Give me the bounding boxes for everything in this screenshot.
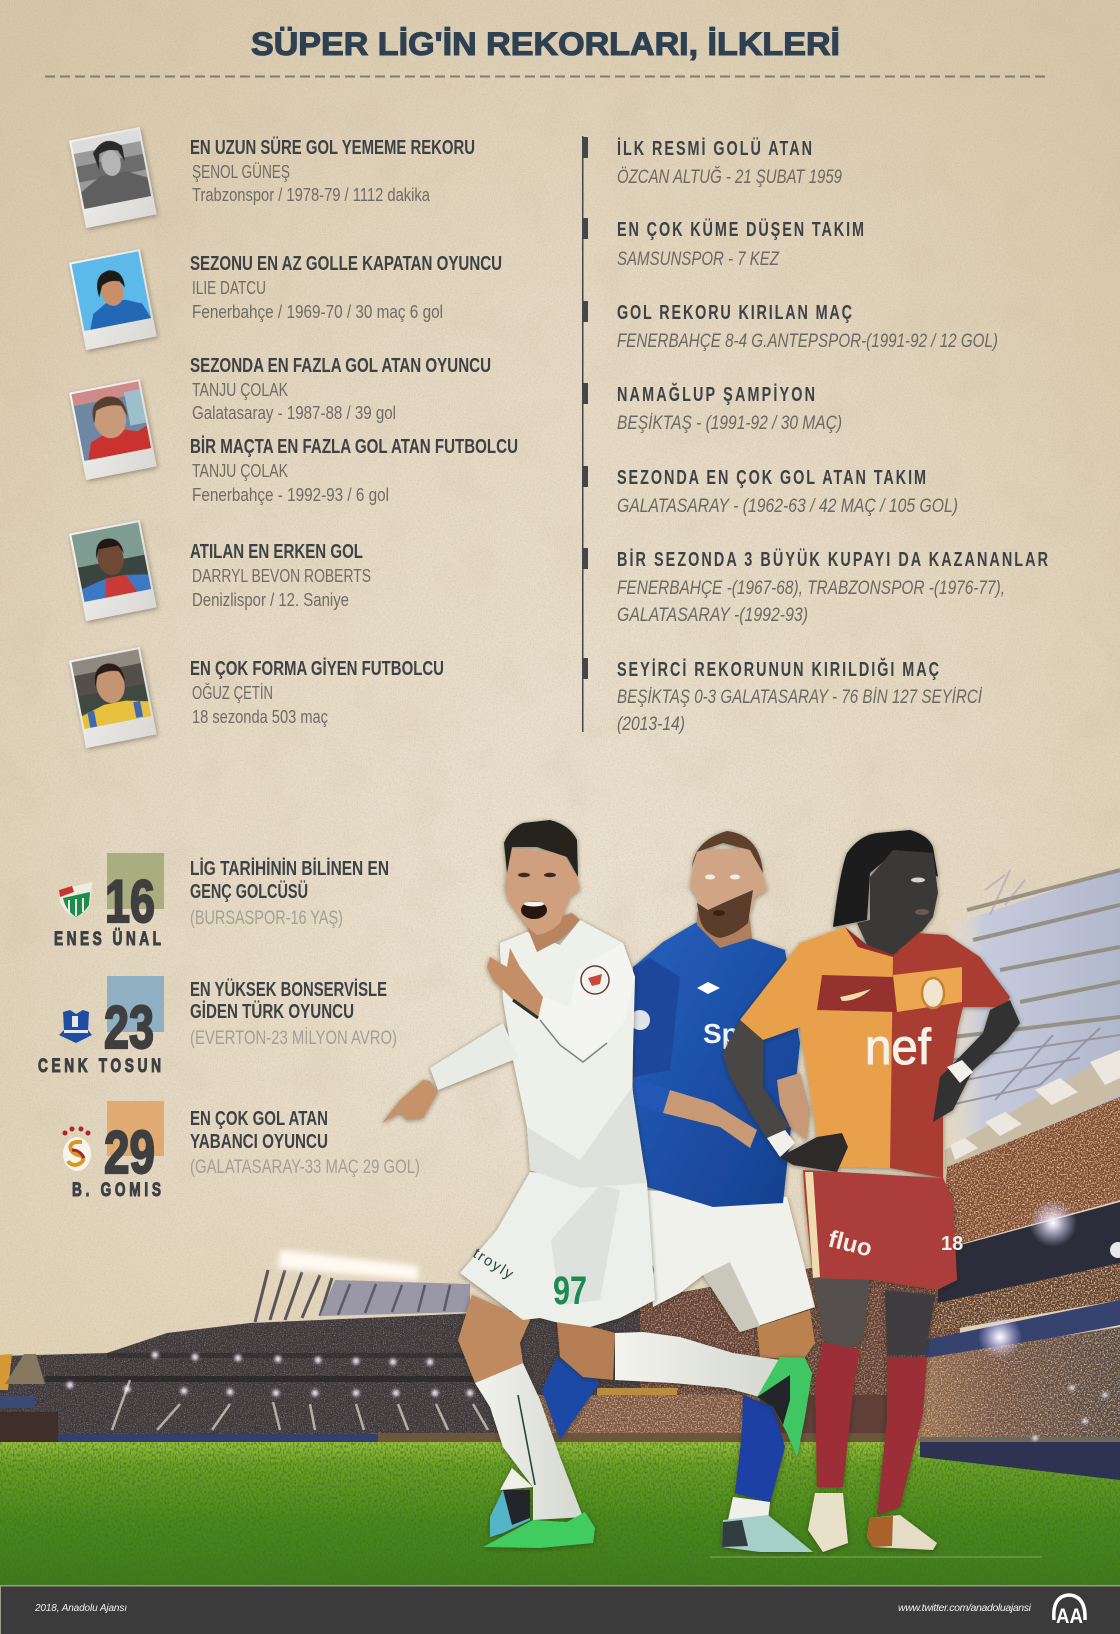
stat: Enes Ünal: 16 <box>105 868 155 935</box>
stat: B. Gomis: YABANCI OYUNCU <box>190 1131 328 1153</box>
footer: twitter link: www.twitter.com/anadoluajansi <box>898 1602 1032 1614</box>
player: Bafétimbi Gomis: nef <box>865 1019 931 1075</box>
player: Cenk Tosun: Sp <box>703 1018 739 1049</box>
record: most goals in a season: TANJU ÇOLAK <box>192 379 288 400</box>
record: goal record match: GOL REKORU KIRILAN MAÇ <box>617 301 852 324</box>
stadium roof right <box>945 868 1120 1172</box>
stat: B. Gomis: 29 <box>104 1119 155 1186</box>
polaroid: Şenol Güneş <box>69 127 157 228</box>
polaroid: Oğuz Çetin <box>69 647 157 748</box>
record: most goals in a season <box>190 355 491 423</box>
record: fewest goals conceded: ILIE DATCU <box>192 277 266 298</box>
stadium background <box>0 868 1120 1585</box>
record: three cups: FENERBAHÇE -(1967-68), TRABZONSPOR -(1976-77), <box>617 577 1005 599</box>
left stand details <box>0 1353 497 1444</box>
record: top scoring team: SEZONDA EN ÇOK GOL ATAN TAKIM <box>617 466 926 489</box>
stat: Cenk Tosun: EN YÜKSEK BONSERVİSLE <box>190 978 387 1001</box>
record: most relegations: EN ÇOK KÜME DÜŞEN TAKIM <box>617 218 864 241</box>
record: longest clean sheet: ŞENOL GÜNEŞ <box>192 161 290 182</box>
record: longest clean sheet: Trabzonspor / 1978-79 / 1112 dakika <box>192 184 431 205</box>
records: right column timeline <box>582 136 1048 735</box>
footer: copyright: 2018, Anadolu Ajansı <box>34 1603 127 1614</box>
record: most goals in a season: Galatasaray - 1987-88 / 39 gol <box>192 402 396 423</box>
stat: Cenk Tosun <box>38 976 397 1077</box>
record: most goals in a match: BİR MAÇTA EN FAZLA GOL ATAN FUTBOLCU <box>190 435 518 458</box>
stat: Cenk Tosun: GİDEN TÜRK OYUNCU <box>190 1000 354 1023</box>
crowd stands: far left and centre <box>0 1240 960 1447</box>
player: Bafétimbi Gomis: 18 <box>941 1233 963 1255</box>
record: three cups: GALATASARAY -(1992-93) <box>617 604 808 626</box>
light flares <box>978 1199 1120 1440</box>
stat: Cenk Tosun: CENK TOSUN <box>38 1055 161 1077</box>
record: top scoring team <box>617 466 958 517</box>
logo: Anadolu Agency: AA <box>1056 1605 1083 1628</box>
roof structure left <box>255 1250 470 1322</box>
record: most goals in a season: SEZONDA EN FAZLA GOL ATAN OYUNCU <box>190 355 491 377</box>
player: Enes Ünal: troyly <box>470 1245 517 1283</box>
record: earliest goal: ATILAN EN ERKEN GOL <box>190 541 363 563</box>
record: most goals in a match: Fenerbahçe - 1992-93 / 6 gol <box>192 484 389 505</box>
record: unbeaten champion <box>617 383 842 434</box>
record: unbeaten champion: BEŞİKTAŞ - (1991-92 / 30 MAÇ) <box>617 412 842 434</box>
record: attendance: BEŞİKTAŞ 0-3 GALATASARAY - 76 BİN 127 SEYİRCİ <box>617 686 982 708</box>
record: most goals in a match <box>190 435 518 505</box>
title: SÜPER LİG'İN REKORLARI, İLKLERİ <box>251 26 840 62</box>
crowd stands: right <box>900 1095 1120 1447</box>
record: most goals in a match: TANJU ÇOLAK <box>192 460 288 481</box>
player: Cenk Tosun <box>542 831 815 1552</box>
record: fewest goals conceded: SEZONU EN AZ GOLLE KAPATAN OYUNCU <box>190 253 502 275</box>
player: Bafétimbi Gomis <box>723 830 1020 1552</box>
record: longest clean sheet <box>190 136 475 205</box>
icon: Everton crest <box>59 1010 92 1043</box>
record: most appearances <box>190 657 444 727</box>
record: top scoring team: GALATASARAY - (1962-63 / 42 MAÇ / 105 GOL) <box>617 495 958 517</box>
record: goal record match: FENERBAHÇE 8-4 G.ANTEPSPOR-(1991-92 / 12 GOL) <box>617 330 998 352</box>
stat: Cenk Tosun: (EVERTON-23 MİLYON AVRO) <box>190 1028 397 1049</box>
record: first goal <box>617 137 842 188</box>
record: three cups: BİR SEZONDA 3 BÜYÜK KUPAYI DA KAZANANLAR <box>617 548 1048 571</box>
record: three cups <box>617 548 1048 626</box>
stat: Enes Ünal: ENES ÜNAL <box>54 928 161 950</box>
logo: Anadolu Agency <box>1054 1595 1085 1628</box>
player: Enes Ünal <box>382 820 812 1548</box>
record: longest clean sheet: EN UZUN SÜRE GOL YEMEME REKORU <box>190 136 475 159</box>
stat: B. Gomis: B. GOMIS <box>72 1179 161 1201</box>
record: goal record match <box>617 301 998 352</box>
record: earliest goal <box>190 541 371 610</box>
polaroid: Ilie Datcu <box>69 249 157 350</box>
polaroid: Darryl Bevon Roberts <box>69 520 157 621</box>
record: most appearances: OĞUZ ÇETİN <box>192 682 273 703</box>
stat: Enes Ünal: (BURSASPOR-16 YAŞ) <box>190 908 343 929</box>
record: earliest goal: Denizlispor / 12. Saniye <box>192 589 349 610</box>
stadium lights <box>67 1352 473 1396</box>
icon: Galatasaray crest <box>62 1126 91 1171</box>
stat: B. Gomis: EN ÇOK GOL ATAN <box>190 1108 328 1130</box>
pitch <box>0 1442 1120 1585</box>
stat: Enes Ünal: LİG TARİHİNİN BİLİNEN EN <box>190 857 389 880</box>
player: Bafétimbi Gomis: fluo <box>826 1226 875 1262</box>
stat: B. Gomis: (GALATASARAY-33 MAÇ 29 GOL) <box>190 1157 420 1178</box>
icon: Bursaspor crest <box>59 882 92 918</box>
record: earliest goal: DARRYL BEVON ROBERTS <box>192 565 371 586</box>
polaroid: Tanju Çolak <box>69 379 157 480</box>
players illustration <box>382 820 1020 1552</box>
record: first goal: İLK RESMİ GOLÜ ATAN <box>617 137 812 160</box>
record: most relegations: SAMSUNSPOR - 7 KEZ <box>617 248 780 270</box>
player: Enes Ünal: 97 <box>553 1269 587 1313</box>
record: first goal: ÖZCAN ALTUĞ - 21 ŞUBAT 1959 <box>617 165 842 188</box>
record: fewest goals conceded <box>190 253 502 322</box>
stats: three player facts <box>38 853 420 1201</box>
record: most relegations <box>617 218 864 270</box>
record: attendance: SEYİRCİ REKORUNUN KIRILDIĞI MAÇ <box>617 658 939 681</box>
records: left column <box>190 136 518 727</box>
record: most appearances: 18 sezonda 503 maç <box>192 706 328 727</box>
stat: B. Gomis <box>62 1101 420 1201</box>
record: unbeaten champion: NAMAĞLUP ŞAMPİYON <box>617 383 815 406</box>
stat: Cenk Tosun: 23 <box>104 994 154 1061</box>
record: fewest goals conceded: Fenerbahçe / 1969-70 / 30 maç 6 gol <box>192 301 443 322</box>
stat: Enes Ünal <box>54 853 389 950</box>
record: most appearances: EN ÇOK FORMA GİYEN FUTBOLCU <box>190 657 444 680</box>
stat: Enes Ünal: GENÇ GOLCÜSÜ <box>190 880 308 903</box>
record: attendance <box>617 658 982 735</box>
record: attendance: (2013-14) <box>617 713 685 735</box>
footer bar <box>0 1585 1120 1634</box>
